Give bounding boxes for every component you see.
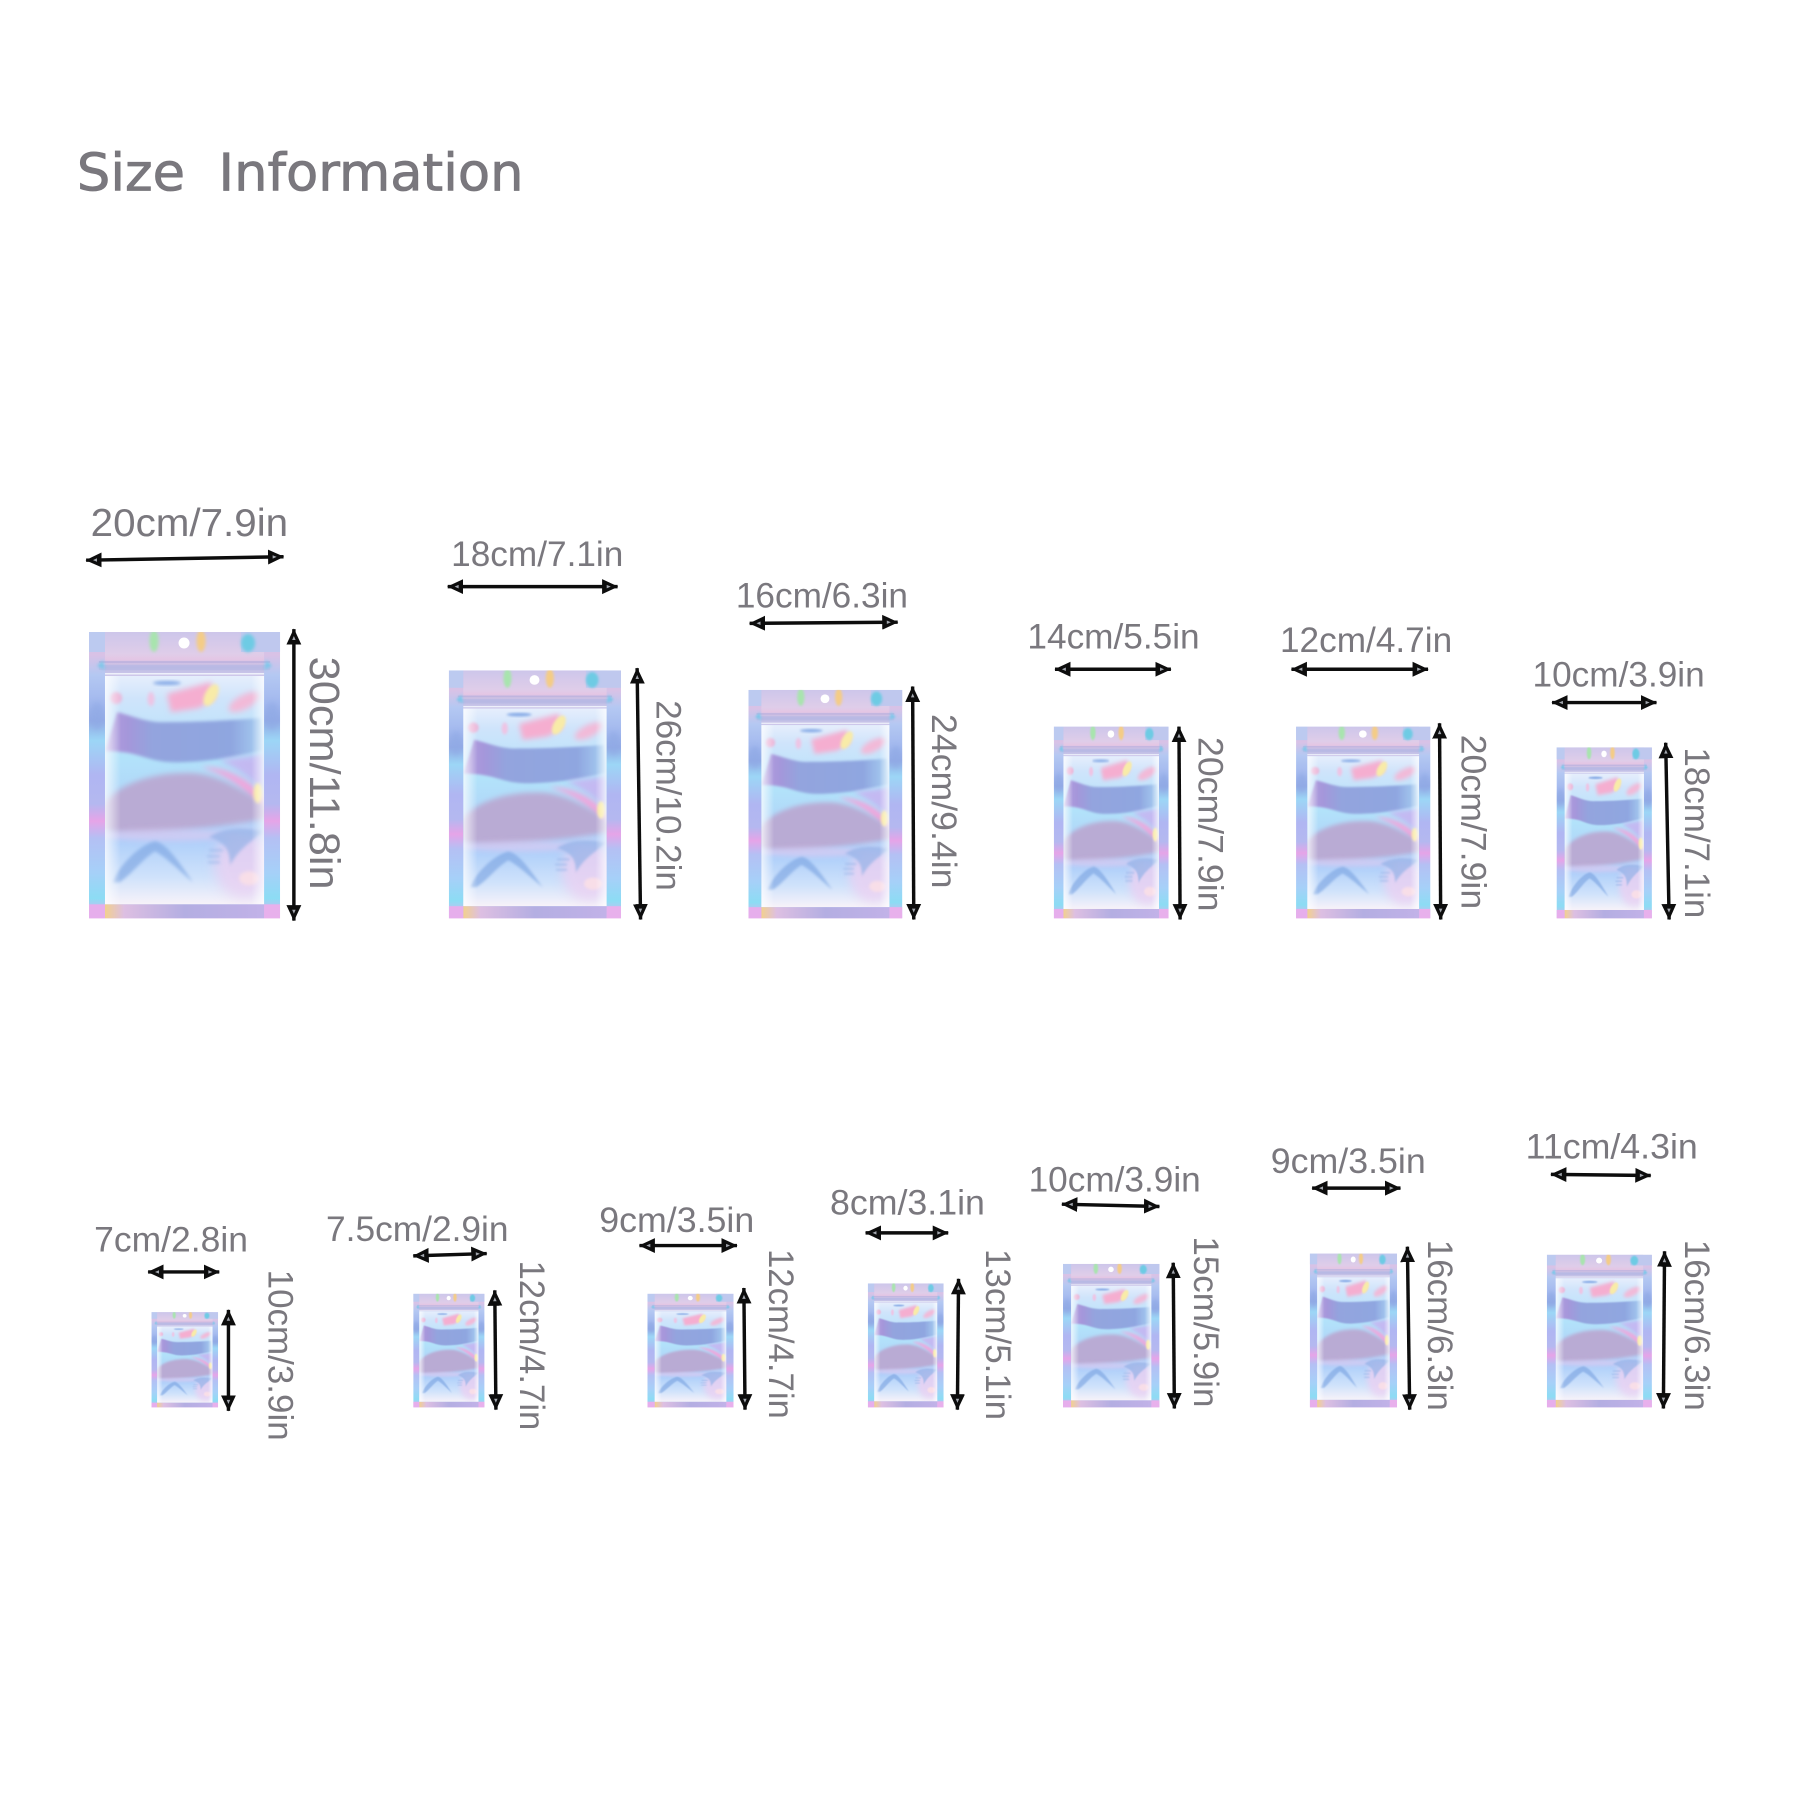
width label: 9cm/3.5in bbox=[599, 1200, 754, 1240]
height arrow bbox=[1663, 1251, 1665, 1409]
height label: 12cm/4.7in bbox=[512, 1260, 552, 1430]
width arrow bbox=[1552, 701, 1657, 704]
height label: 13cm/5.1in bbox=[978, 1249, 1018, 1420]
width arrow bbox=[86, 557, 284, 560]
height arrow bbox=[1440, 723, 1441, 920]
height label: 26cm/10.2in bbox=[649, 700, 689, 891]
height label: 18cm/7.1in bbox=[1677, 747, 1717, 918]
height label: 24cm/9.4in bbox=[924, 714, 964, 889]
width label: 7cm/2.8in bbox=[94, 1219, 248, 1259]
bag image bbox=[1054, 725, 1169, 918]
width arrow bbox=[866, 1231, 948, 1234]
height label: 20cm/7.9in bbox=[1190, 737, 1230, 911]
width arrow bbox=[413, 1254, 487, 1256]
height label: 16cm/6.3in bbox=[1420, 1240, 1460, 1411]
width label: 20cm/7.9in bbox=[91, 502, 288, 545]
panel: bag 11 x 16 cm bbox=[1526, 1126, 1717, 1411]
width arrow bbox=[1062, 1204, 1159, 1207]
width arrow bbox=[148, 1270, 219, 1273]
width arrow bbox=[1291, 668, 1428, 671]
bag image bbox=[1296, 725, 1430, 918]
panel: bag 9 x 12 cm bbox=[599, 1200, 801, 1419]
width arrow bbox=[1551, 1174, 1651, 1176]
height arrow bbox=[744, 1288, 745, 1410]
width arrow bbox=[750, 622, 898, 623]
panel: bag 8 x 13 cm bbox=[830, 1183, 1018, 1420]
width label: 7.5cm/2.9in bbox=[326, 1209, 509, 1249]
height arrow bbox=[227, 1310, 230, 1411]
bag image bbox=[152, 1311, 218, 1407]
width label: 9cm/3.5in bbox=[1271, 1141, 1426, 1181]
bag image bbox=[89, 630, 280, 918]
height arrow bbox=[495, 1290, 496, 1410]
height arrow bbox=[957, 1279, 959, 1410]
height arrow bbox=[1407, 1247, 1410, 1410]
height arrow bbox=[913, 686, 914, 920]
bag image bbox=[748, 688, 902, 918]
width arrow bbox=[1055, 668, 1171, 671]
width label: 11cm/4.3in bbox=[1526, 1126, 1698, 1166]
height arrow bbox=[637, 668, 641, 920]
height label: 16cm/6.3in bbox=[1677, 1240, 1717, 1411]
width arrow bbox=[1312, 1187, 1401, 1190]
panel: bag 9 x 16 cm bbox=[1271, 1141, 1460, 1411]
height label: 30cm/11.8in bbox=[301, 657, 348, 890]
bag image bbox=[647, 1293, 734, 1407]
panel: bag 16 x 24 cm bbox=[736, 575, 964, 920]
panel: bag 10 x 18 cm bbox=[1533, 654, 1717, 920]
width label: 8cm/3.1in bbox=[830, 1183, 985, 1223]
bag image bbox=[1557, 746, 1652, 918]
width arrow bbox=[448, 585, 618, 588]
width label: 16cm/6.3in bbox=[736, 575, 908, 615]
height label: 12cm/4.7in bbox=[761, 1249, 801, 1419]
height arrow bbox=[292, 629, 295, 921]
bag image bbox=[1310, 1252, 1397, 1407]
width label: 18cm/7.1in bbox=[451, 534, 623, 574]
bag image bbox=[449, 669, 621, 918]
width label: 12cm/4.7in bbox=[1280, 620, 1452, 660]
height arrow bbox=[1173, 1263, 1174, 1409]
panel: bag 20 x 30 cm bbox=[86, 502, 348, 921]
height label: 15cm/5.9in bbox=[1186, 1236, 1226, 1407]
width label: 10cm/3.9in bbox=[1029, 1160, 1201, 1200]
width arrow bbox=[639, 1244, 737, 1247]
panel: bag 12 x 20 cm bbox=[1280, 620, 1493, 920]
panel: bag 18 x 26 cm bbox=[448, 534, 689, 920]
title: Size Information bbox=[77, 144, 523, 204]
height label: 20cm/7.9in bbox=[1453, 735, 1493, 909]
panel: bag 7.5 x 12 cm bbox=[326, 1209, 552, 1430]
bag image bbox=[413, 1293, 484, 1407]
panel: bag 7 x 10 cm bbox=[94, 1219, 301, 1441]
bag image bbox=[1547, 1254, 1652, 1407]
height arrow bbox=[1179, 727, 1180, 920]
height label: 10cm/3.9in bbox=[261, 1270, 301, 1441]
height arrow bbox=[1666, 743, 1669, 920]
bag image bbox=[1063, 1263, 1159, 1407]
panel: bag 14 x 20 cm bbox=[1027, 617, 1230, 920]
width label: 10cm/3.9in bbox=[1533, 654, 1705, 694]
bag image bbox=[868, 1283, 944, 1407]
width label: 14cm/5.5in bbox=[1027, 617, 1200, 657]
panel: bag 10 x 15 cm bbox=[1029, 1160, 1226, 1409]
